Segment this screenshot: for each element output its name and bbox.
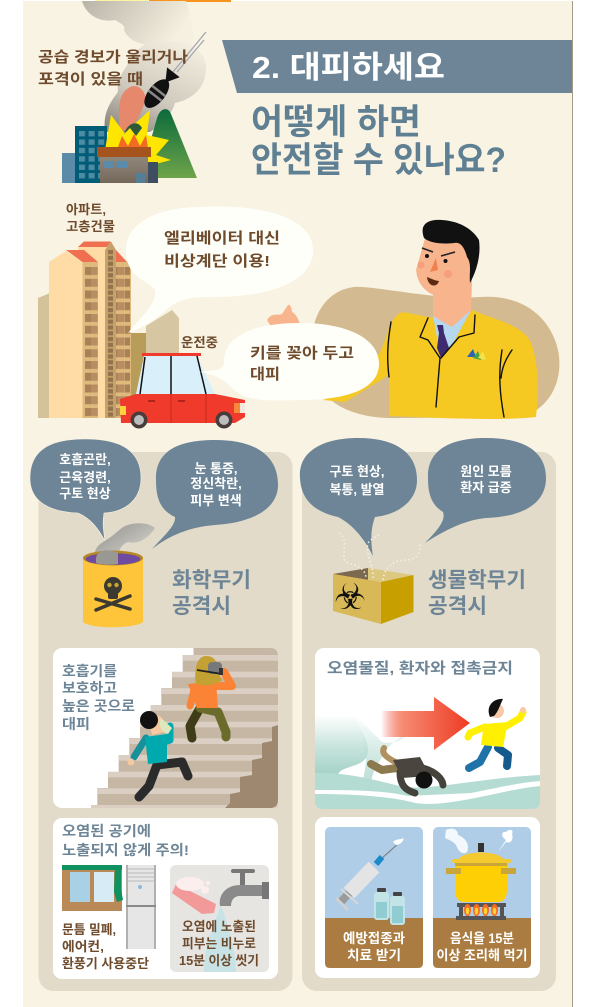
fallen person [371,748,443,793]
tile: vaccination [325,827,423,968]
jacket lines [388,315,512,417]
air conditioner [126,865,156,949]
siren caption: 포격이 있을 때 [38,71,143,88]
gas burner [456,903,506,920]
contaminated ground [315,773,540,809]
tile caption [436,931,528,963]
skull and crossbones [96,577,130,610]
chemical heading [172,569,251,618]
bubble text: 엘리베이터 대신 [164,230,280,247]
pot [446,843,516,902]
panel caption: 오염에 노출된 [182,919,256,934]
chemical heading: 화학무기 [172,569,251,592]
smoke plume [105,41,206,132]
bomb trail [173,32,206,72]
man with gas mask [188,656,232,738]
distant buildings [38,293,50,418]
hand [267,305,300,325]
header title: 2. 대피하세요 [252,50,445,85]
tile caption: 예방접종과 [343,931,406,946]
card title: 오염물질, 환자와 접촉금지 [327,660,513,677]
bubble text: 대피 [250,366,280,383]
symptom bubble 1: 근육경련, [59,470,111,485]
contaminated smoke [315,715,368,809]
biohazard symbol: ☣ [334,577,366,618]
tile caption [343,931,406,963]
biological heading: 생물학무기 [428,569,526,592]
speech bubble: stairs [126,207,313,333]
facial features [418,248,455,286]
symptom bubble 3: 구토 현상, [329,464,385,479]
bubble text [250,345,354,383]
apartment buildings [38,242,179,418]
front apartment [49,250,98,418]
faucet [220,869,269,906]
card caption: 에어컨, [62,939,104,954]
card caption [62,922,149,971]
bomb [140,67,180,112]
label: driving: 운전중 [181,335,218,350]
label: apartments [66,202,115,234]
card heading [62,823,189,858]
fire [105,110,171,165]
card text: 높은 곳으로 [62,698,135,714]
symptom bubble 2: 눈 통증, [194,461,238,476]
panel caption [179,919,259,968]
panel caption: 피부는 비누로 [182,936,256,951]
tile caption: 치료 받기 [347,948,401,963]
card: stairs [53,648,278,808]
subtitle question: 어떻게 하면 [251,103,421,142]
card heading: 노출되지 않게 주의! [62,842,189,858]
card: avoid contaminated air [53,818,278,979]
symptom bubble 1 [30,439,141,541]
card caption: 환풍기 사용중단 [62,956,149,971]
man covering mouth [128,711,188,797]
symptom bubble 1: 구토 현상 [59,486,111,501]
card caption: 문틈 밀폐, [62,922,116,937]
mountain [140,109,197,178]
man in yellow jacket [267,220,559,419]
shirt [433,310,471,358]
symptom bubble 2: 정신착란, [190,476,242,491]
tan backdrop [312,287,559,418]
panel: chemical weapons [30,439,292,991]
open box [333,568,414,624]
subtitle question [251,103,506,180]
label: apartments: 고층건물 [66,219,115,234]
running person [468,699,526,768]
smoke cloud [82,1,193,46]
contaminated smoke 2 [355,715,408,809]
bubble text: 비상계단 이용! [164,253,270,270]
speech bubble: car keys [200,323,379,401]
chemical heading: 공격시 [172,595,231,618]
dark blue building [75,126,107,183]
symptom bubble 4: 원인 모름 [460,464,512,479]
steam [445,829,513,853]
panel: biological weapons [300,438,556,991]
tile caption: 음식을 15분 [450,931,514,946]
water stream [204,905,236,972]
symptom bubble 2: 피부 변색 [190,493,242,508]
symptom bubble 1: 호흡곤란, [59,452,111,467]
chemical canister [83,550,143,627]
washing panel [170,865,269,972]
neck [433,280,472,340]
siren caption [38,49,188,88]
card text [62,663,135,732]
burning house [97,147,158,183]
symptom bubble 4 [425,438,546,543]
tie [437,325,449,358]
symptom bubble 3 [300,438,417,556]
red arrow [381,697,470,750]
card text: 보호하고 [62,680,117,696]
card: treatment and cooking [315,817,540,978]
symptom bubble 2 [152,440,278,549]
card: no contact [315,648,540,809]
light blue building [62,153,80,183]
symptom bubble 3: 복통, 발열 [329,482,385,497]
label: apartments: 아파트, [66,202,106,217]
vials [374,888,405,925]
biological heading [428,569,526,618]
tile caption: 이상 조리해 먹기 [436,948,528,963]
red car [120,353,245,428]
smoke from canister [95,523,155,562]
card text: 호흡기를 [62,663,117,679]
illustration: bombed town [62,1,206,183]
card text: 대피 [62,716,90,732]
tile: cooking [433,827,531,968]
lapel badge [467,349,486,360]
header band [222,40,572,93]
biological heading: 공격시 [428,595,487,618]
window [62,865,123,911]
bubble text: 키를 꽂아 두고 [250,345,354,362]
hair [423,220,480,283]
panel caption: 15분 이상 씻기 [179,953,259,968]
face [416,228,472,298]
card heading: 오염된 공기에 [62,823,151,839]
stair side wall [225,725,278,808]
bubble text [164,230,280,270]
rear apartment [78,242,131,418]
syringe [336,838,403,910]
red smoke [119,86,145,132]
inner flame [118,134,148,148]
siren caption: 공습 경보가 울리거나 [38,49,188,66]
stairs [91,648,278,808]
damaged roof [124,123,142,136]
soap [172,877,216,914]
subtitle question: 안전할 수 있나요? [251,141,506,180]
dotted spores [339,533,420,580]
symptom bubble 4: 환자 급증 [460,480,512,495]
jacket [323,310,538,419]
